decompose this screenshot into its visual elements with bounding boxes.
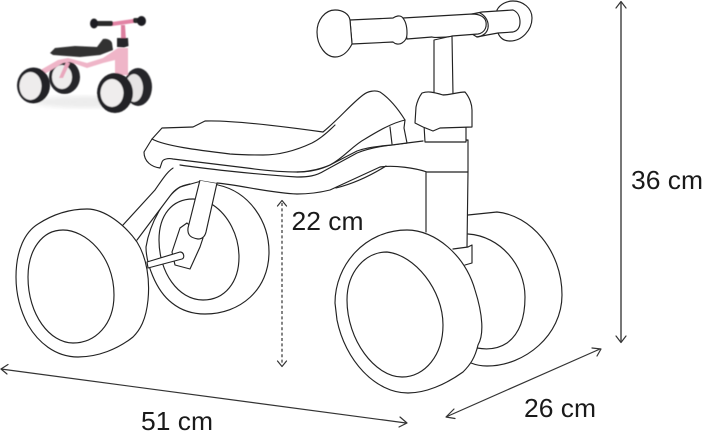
rear fork: [59, 62, 70, 78]
label: 36 cm: 36 cm: [631, 165, 703, 195]
left knob: [317, 10, 352, 57]
right hand grip and knob: [472, 1, 532, 41]
handlebar bar: [403, 14, 486, 39]
near front wheel: [97, 73, 133, 113]
frame legs: [123, 167, 205, 240]
label: 22 cm: 22 cm: [292, 206, 364, 236]
far rear wheel: [49, 60, 80, 94]
pink stem and handlebar bar: [121, 25, 126, 40]
steering stem and collar: [415, 36, 472, 142]
collar: [117, 38, 128, 48]
black seat: [50, 39, 113, 57]
label: 51 cm: 51 cm: [141, 406, 213, 436]
far front wheel: [453, 212, 562, 366]
arrow: 26 cm width: [446, 348, 601, 418]
left hand grip: [350, 16, 407, 44]
main frame: [173, 140, 468, 247]
far front wheel: [124, 68, 152, 106]
black grips: [90, 16, 146, 28]
arrow: 22 cm seat height (dotted): [278, 200, 286, 366]
label: 26 cm: 26 cm: [524, 393, 596, 423]
arrow: 36 cm height: [616, 2, 626, 342]
near front wheel: [335, 230, 482, 393]
arrow: 51 cm length: [1, 364, 407, 427]
rear fork and axle: [147, 180, 217, 269]
photo: pink ride-on toy thumbnail: [17, 16, 152, 113]
line drawing: ride-on toy: [16, 1, 562, 393]
near rear wheel: [16, 209, 149, 357]
pink frame: [37, 48, 128, 75]
seat: [144, 91, 407, 172]
far rear wheel: [146, 180, 269, 314]
near rear wheel: [17, 68, 50, 104]
